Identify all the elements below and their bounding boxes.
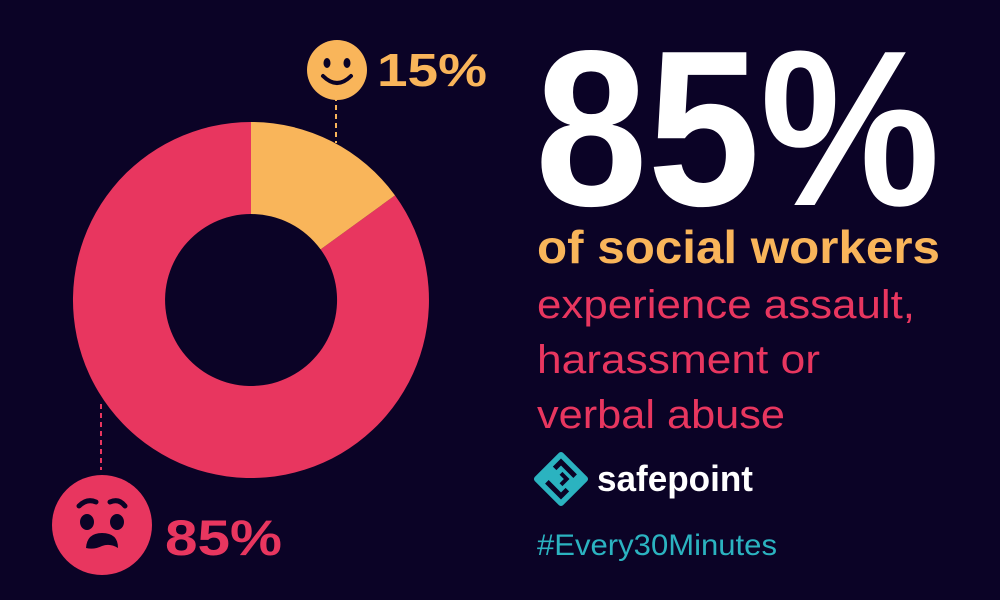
logo: safepoint: safepoint — [597, 458, 753, 499]
description text: experience assault, — [537, 283, 915, 327]
label: 85%: 85% — [165, 510, 282, 566]
icon: logo diamond — [533, 451, 589, 507]
donut: 15% segment — [251, 122, 395, 249]
description text: harassment or — [537, 338, 820, 382]
icon: happy face — [307, 40, 367, 100]
description text: verbal abuse — [537, 393, 785, 437]
donut: 85% segment — [73, 122, 429, 478]
headline: 85%: 85% — [535, 5, 940, 253]
logo: safepoint — [533, 451, 753, 507]
subheading: of social workers: of social workers — [537, 221, 940, 273]
label: 15%: 15% — [377, 44, 487, 96]
description text — [537, 283, 915, 437]
dashed leader line: 85% — [100, 404, 102, 470]
dashed leader line: 15% — [335, 96, 337, 143]
hashtag: #Every30Minutes — [537, 529, 777, 562]
icon: shocked face — [52, 475, 152, 575]
donut chart — [73, 122, 429, 478]
